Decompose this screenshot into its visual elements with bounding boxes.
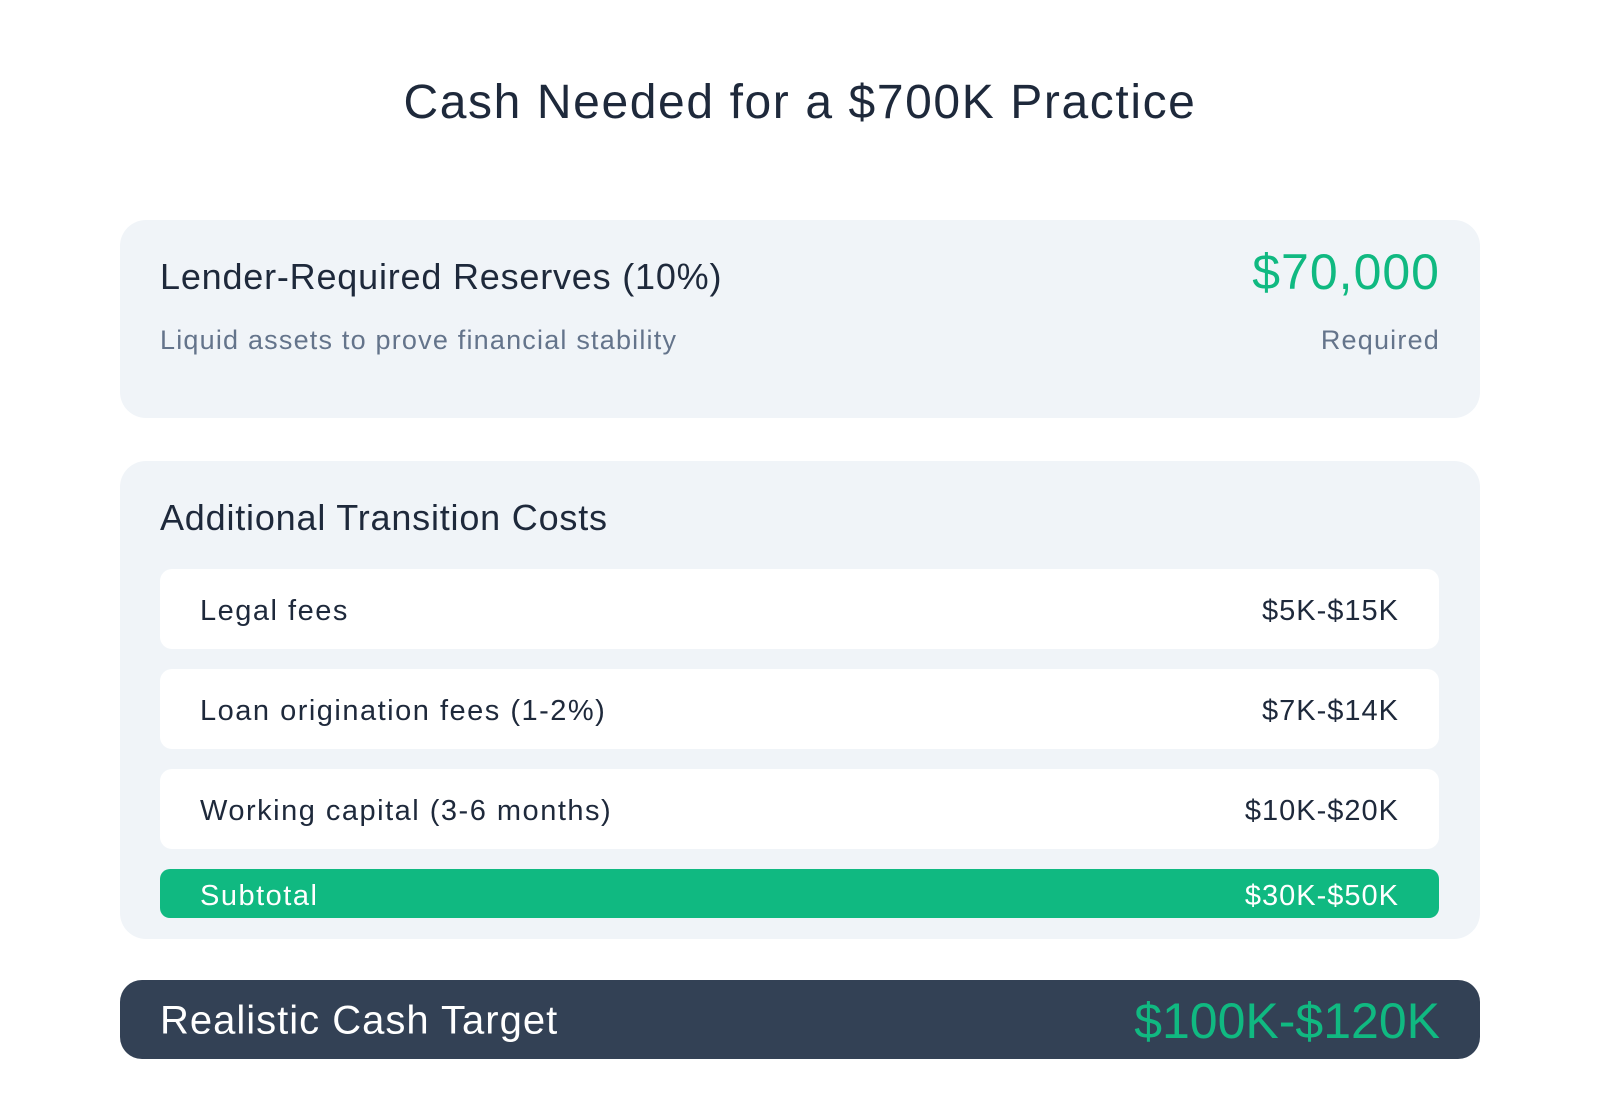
subtotal bar: $30K-$50K (1245, 880, 1399, 912)
realistic cash target bar (120, 980, 1480, 1059)
reserves amount: $70,000 (1252, 244, 1440, 300)
row: legal fees: $5K-$15K (1262, 595, 1399, 627)
panel: lender reserves (120, 220, 1480, 418)
target value: $100K-$120K (1134, 993, 1440, 1049)
row: legal fees: Legal fees (200, 595, 349, 627)
row: working capital (160, 769, 1439, 849)
required label: Required (1321, 325, 1440, 355)
row: working capital: Working capital (3-6 months) (200, 795, 612, 827)
subtotal bar: Subtotal (200, 880, 318, 912)
reserves heading: Lender-Required Reserves (10%) (160, 256, 722, 297)
row: working capital: $10K-$20K (1245, 795, 1399, 827)
target label: Realistic Cash Target (160, 998, 558, 1042)
row: loan origination (160, 669, 1439, 749)
row: loan origination: $7K-$14K (1262, 695, 1399, 727)
panel: additional transition costs (120, 461, 1480, 939)
reserves description: Liquid assets to prove financial stability (160, 325, 677, 355)
row: legal fees (160, 569, 1439, 649)
title: Cash Needed for a $700K Practice (404, 76, 1196, 129)
costs heading: Additional Transition Costs (160, 497, 608, 538)
row: loan origination: Loan origination fees (1-2%) (200, 695, 606, 727)
subtotal bar (160, 869, 1439, 918)
